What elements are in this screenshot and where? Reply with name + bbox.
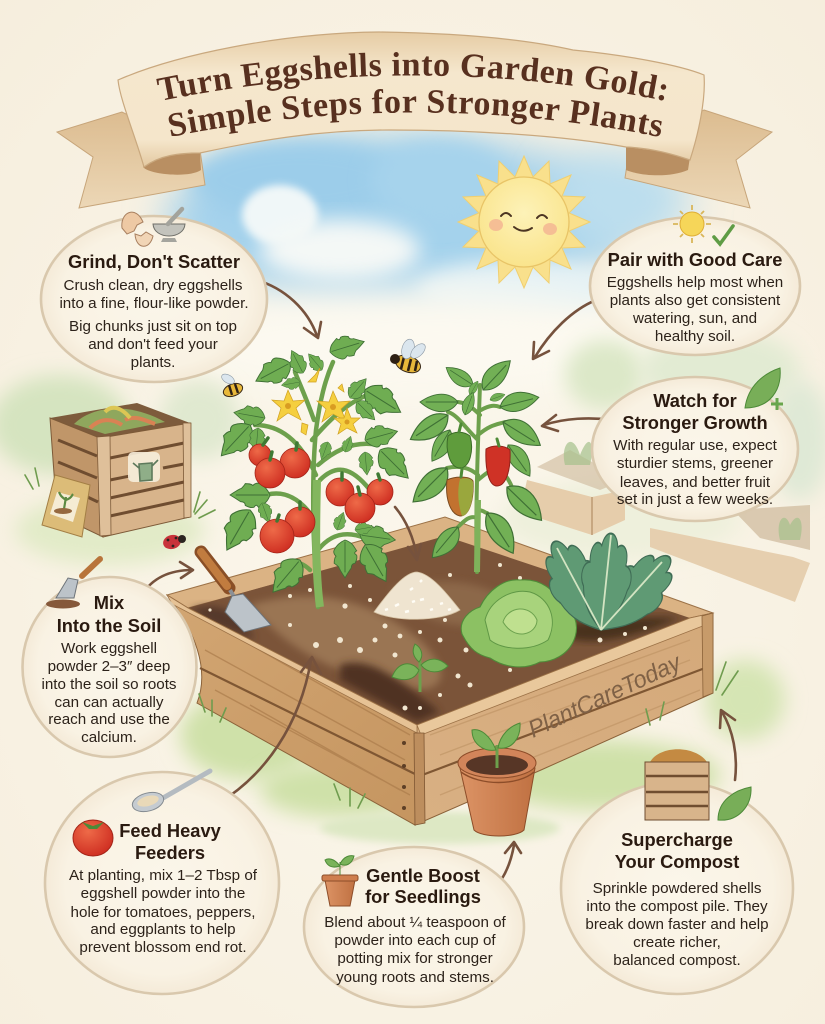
panel: grind don't scatter: plants.	[131, 354, 175, 371]
grass tufts	[199, 662, 738, 808]
panel: grind don't scatter	[41, 209, 267, 382]
panel: watch for stronger growth: Stronger Growth	[622, 412, 768, 433]
background raised beds	[520, 442, 810, 602]
panel: feed heavy feeders	[45, 771, 279, 994]
panel: mix into the soil: calcium.	[81, 729, 137, 746]
panel: feed heavy feeders: Feeders	[135, 842, 205, 863]
panel: mix into the soil: powder 2–3″ deep	[48, 658, 170, 675]
panel: mix into the soil: into the soil so roots	[41, 676, 177, 693]
heading: Pair with Good Care	[608, 249, 782, 270]
panel: gentle boost for seedlings: for Seedlings	[365, 886, 481, 907]
icon: leaf and plus	[745, 368, 783, 410]
peppers	[447, 432, 472, 468]
terracotta pot with sprout	[458, 723, 536, 836]
seedling in soil	[392, 644, 448, 692]
banner left tail	[57, 112, 205, 208]
panel: supercharge your compost: into the compost pile. They	[586, 898, 768, 915]
leaves	[250, 353, 296, 392]
stem	[255, 362, 378, 607]
flowers	[272, 368, 360, 435]
body text: At planting, mix 1–2 Tbsp of	[69, 867, 258, 884]
bed left face	[167, 595, 419, 825]
heading: Grind, Don't Scatter	[68, 251, 240, 272]
panel: feed heavy feeders: hole for tomatoes, peppers,	[71, 904, 255, 921]
panel: gentle boost for seedlings: young roots and stems.	[336, 969, 494, 986]
panel: pair with good care: watering, sun, and	[632, 310, 757, 327]
panel: pair with good care	[590, 205, 800, 355]
panel: gentle boost for seedlings	[304, 847, 524, 1007]
heading: Feed Heavy	[119, 820, 222, 841]
banner title	[56, 31, 773, 209]
body text: With regular use, expect	[613, 437, 778, 454]
icon: tomato	[73, 820, 113, 856]
panel: mix into the soil	[22, 559, 196, 757]
kale	[531, 530, 688, 648]
panel: gentle boost for seedlings: potting mix for stronger	[337, 950, 493, 967]
bee large	[390, 338, 428, 376]
panel: watch for stronger growth: leaves, and better fruit	[620, 474, 771, 491]
arrow: to powder pile	[395, 507, 421, 560]
icon: eggshells and mortar	[122, 209, 185, 246]
panel: grind don't scatter: into a fine, flour-like powder.	[59, 295, 249, 312]
panel: watch for stronger growth: sturdier stems, greener	[617, 455, 773, 472]
panel: supercharge your compost: Your Compost	[615, 851, 739, 872]
icon: spoon with powder	[130, 771, 210, 815]
panel: feed heavy feeders: eggshell powder into the	[81, 885, 245, 902]
background scene: sky, clouds and meadow	[0, 135, 825, 844]
watering can label	[128, 452, 160, 482]
arrow: feeders to soil	[219, 657, 321, 803]
bed right face	[415, 613, 713, 825]
eggshell powder pile	[374, 572, 460, 619]
icon: small compost bin	[645, 749, 709, 820]
bed rim front	[167, 595, 417, 733]
bin right face	[100, 423, 190, 537]
icon: small trowel	[46, 559, 100, 608]
seed bag	[42, 475, 90, 537]
compost bin with seed bag	[25, 403, 215, 537]
raised garden bed	[167, 517, 738, 825]
tomatoes	[249, 444, 393, 553]
banner title: Simple Steps for Stronger Plants	[168, 89, 662, 136]
panel: supercharge your compost: create richer,	[633, 934, 721, 951]
sun	[458, 156, 590, 288]
body text: Work eggshell	[61, 640, 157, 657]
heading: Watch for	[653, 390, 737, 411]
watermark: PlantCareToday	[524, 648, 687, 743]
panel: mix into the soil: can can actually	[55, 694, 164, 711]
arrow: compost to bed	[720, 710, 736, 780]
leaves	[442, 362, 477, 392]
banner title: Turn Eggshells into Garden Gold:	[156, 52, 666, 100]
panel: watch for stronger growth	[592, 368, 798, 521]
panel: mix into the soil: Into the Soil	[57, 615, 161, 636]
eggshell flecks	[208, 563, 647, 710]
tomato plant	[212, 331, 417, 607]
lettuce	[461, 580, 576, 667]
panel: mix into the soil: reach and use the	[48, 711, 170, 728]
heading: Mix	[94, 592, 125, 613]
panel: watch for stronger growth: set in just a few weeks.	[617, 491, 773, 508]
bin opening	[50, 403, 190, 438]
bed back rim	[167, 517, 713, 622]
arrow: growth to pepper	[542, 415, 612, 431]
body text: Crush clean, dry eggshells	[64, 277, 243, 294]
panel: grind don't scatter: Big chunks just sit on top	[69, 318, 237, 335]
icon: leaf	[718, 787, 751, 820]
panel: gentle boost for seedlings: powder into each cup of	[334, 932, 496, 949]
soil	[188, 536, 690, 725]
stem	[447, 385, 512, 572]
heading: Gentle Boost	[366, 865, 480, 886]
arrow: grind to plant	[256, 280, 321, 338]
panel: grind don't scatter: and don't feed your	[88, 336, 218, 353]
title text, curved	[160, 76, 666, 101]
icon: sun and check	[673, 205, 733, 244]
banner right tail	[625, 110, 772, 208]
arrow: seedlings to pot	[493, 842, 521, 890]
body text: Eggshells help most when	[607, 274, 783, 291]
garden trowel in soil	[201, 552, 271, 632]
panel: supercharge your compost: balanced compost.	[613, 952, 741, 969]
body text: Blend about ¼ teaspoon of	[324, 914, 507, 931]
banner ribbon	[118, 32, 704, 167]
heading: Supercharge	[621, 829, 733, 850]
body text: Sprinkle powdered shells	[593, 880, 762, 897]
panel: feed heavy feeders: prevent blossom end rot.	[79, 939, 247, 956]
panel: supercharge your compost: break down faster and help	[585, 916, 769, 933]
bin left face	[50, 418, 103, 537]
panel: feed heavy feeders: and eggplants to help	[90, 921, 236, 938]
bee small	[220, 372, 244, 399]
pepper plant	[405, 354, 550, 572]
panel: pair with good care: healthy soil.	[655, 328, 735, 345]
icon: small pot	[322, 856, 358, 906]
arrow: mix to soil	[142, 562, 193, 595]
ladybug	[161, 533, 186, 551]
compost contents	[74, 409, 165, 434]
panel: pair with good care: plants also get consistent	[610, 292, 781, 309]
arrow: care to pepper	[533, 300, 596, 359]
panel: supercharge your compost	[561, 749, 793, 994]
